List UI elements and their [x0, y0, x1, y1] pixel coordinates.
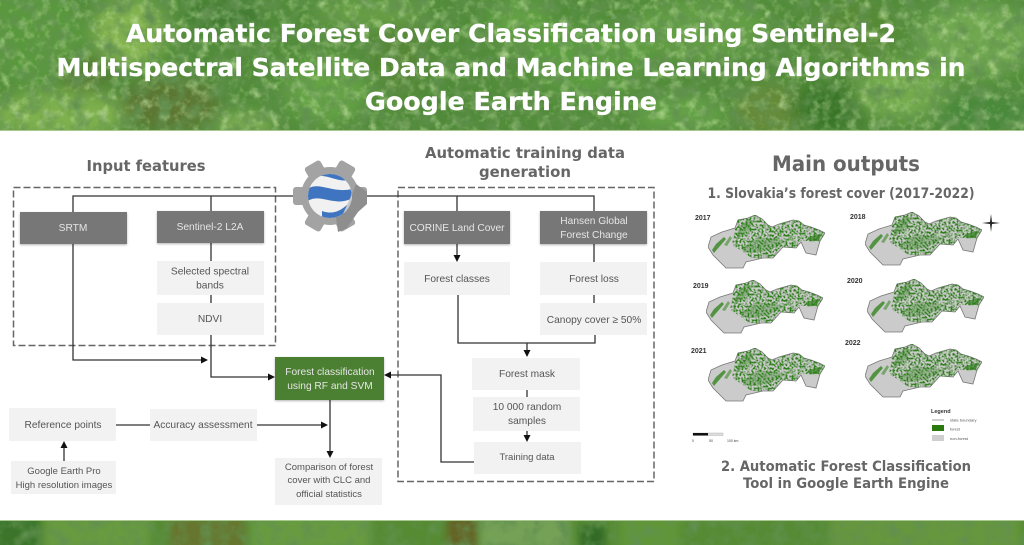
box: Hansen Global Forest Change [540, 211, 647, 244]
box: random samples: 10 000 random [493, 402, 561, 413]
box: accuracy assessment [150, 409, 257, 441]
map legend: non-forest [950, 436, 969, 441]
title [56, 19, 966, 116]
box: NDVI: NDVI [198, 314, 222, 325]
box: NDVI [157, 303, 264, 335]
box: forest mask: Forest mask [499, 369, 556, 380]
box: canopy cover [540, 303, 647, 335]
box: CORINE Land Cover [404, 211, 510, 244]
box: Sentinel-2 L2A [157, 211, 264, 243]
box: forest mask [472, 358, 580, 390]
box: SRTM: SRTM [59, 223, 87, 234]
heading: automatic training data generation: generation [479, 163, 571, 181]
map legend: state boundary [950, 418, 976, 422]
map: 2020 [847, 278, 985, 332]
scale bar: 0 [692, 439, 694, 443]
box: forest loss [540, 262, 647, 295]
box: reference points: Reference points [24, 420, 102, 431]
map: 2017 [695, 215, 826, 268]
title: Automatic Forest Cover Classification using Sentinel-2 [126, 19, 896, 48]
box: comparison: Comparison of forest [285, 462, 373, 473]
map legend: forest [950, 426, 961, 432]
box: comparison [275, 458, 382, 505]
box: training data [474, 442, 581, 474]
box: forest loss: Forest loss [569, 274, 619, 285]
heading: automatic forest classification tool: Tool in Google Earth Engine [743, 476, 949, 492]
connector lines from Earth Engine [73, 196, 594, 212]
box: random samples: samples [508, 416, 546, 427]
map legend: Legend [931, 409, 951, 415]
box: training data: Training data [499, 452, 555, 463]
box: Hansen Global Forest Change: Hansen Global [560, 216, 628, 227]
heading: automatic training data generation: Automatic training data [425, 144, 625, 162]
box: selected spectral bands [157, 261, 264, 295]
panel: input features dashed frame [14, 188, 276, 346]
map: 2019 [693, 280, 824, 333]
box: CORINE Land Cover: CORINE Land Cover [409, 223, 505, 234]
box: Google Earth Pro [11, 461, 116, 494]
heading: input features: Input features [86, 157, 206, 175]
scale bar: 50 [709, 439, 713, 443]
panel: training data dashed frame [398, 188, 654, 482]
title: Google Earth Engine [365, 87, 657, 116]
box: SRTM [20, 212, 127, 244]
map: 2022: 2022 [845, 340, 861, 347]
box: selected spectral bands: bands [196, 280, 224, 292]
heading: automatic forest classification tool [721, 459, 971, 492]
heading: automatic forest classification tool: 2. Automatic Forest Classification [721, 459, 971, 475]
heading: main outputs: Main outputs [772, 152, 920, 176]
icon: Google Earth Engine gear [293, 159, 367, 233]
box: forest classification: Forest classification [285, 367, 375, 378]
box: forest classes: Forest classes [424, 274, 490, 285]
box: comparison: official statistics [296, 489, 362, 500]
map: 2019: 2019 [693, 283, 709, 290]
box: Google Earth Pro: High resolution images [16, 480, 113, 491]
box: reference points [9, 408, 116, 441]
scale bar: 100 km [727, 439, 739, 443]
box: comparison: cover with CLC and [288, 475, 370, 486]
box: forest classification: using RF and SVM [287, 381, 373, 392]
map: 2021 [691, 348, 826, 401]
box: forest classification [275, 357, 384, 400]
heading: Slovakia's forest cover: 1. Slovakia’s forest cover (2017-2022) [708, 186, 974, 202]
title: Multispectral Satellite Data and Machine Learning Algorithms in [56, 53, 966, 82]
background banner: forest top [0, 0, 1024, 139]
map: 2018 [850, 212, 983, 265]
flow connectors [60, 243, 595, 462]
box: canopy cover: Canopy cover ≥ 50% [547, 315, 641, 326]
heading: automatic training data generation [425, 144, 625, 181]
map: 2022 [845, 340, 983, 397]
box: accuracy assessment: Accuracy assessment [153, 420, 253, 431]
box: forest classes [404, 262, 510, 295]
scale bar [692, 433, 739, 443]
map: 2021: 2021 [691, 348, 707, 355]
map: 2020: 2020 [847, 278, 863, 285]
box: selected spectral bands: Selected spectral [171, 266, 249, 278]
box: random samples [473, 397, 580, 431]
box: Sentinel-2 L2A: Sentinel-2 L2A [177, 222, 244, 233]
box: Google Earth Pro: Google Earth Pro [27, 466, 101, 477]
box: Hansen Global Forest Change: Forest Change [560, 230, 628, 241]
map: 2017: 2017 [695, 215, 711, 222]
map: 2018: 2018 [850, 214, 866, 221]
background banner: forest bottom [0, 520, 1024, 545]
icon: north compass star [982, 214, 1000, 232]
map legend [931, 409, 976, 441]
